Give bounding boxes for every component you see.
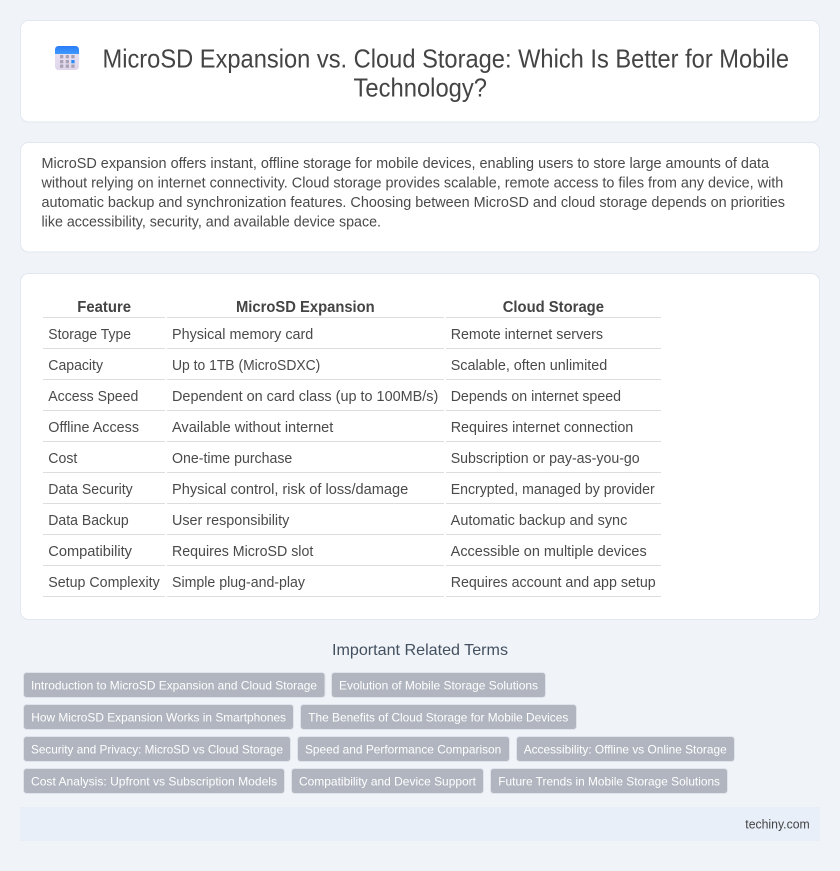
tag: speed and performance: Speed and Performance Comparison — [305, 742, 501, 756]
tag: compatibility: Compatibility and Device Support — [299, 774, 477, 788]
title: Technology? — [354, 74, 487, 102]
row: setup complexity: Simple plug-and-play — [172, 575, 306, 591]
footer: techiny.com — [745, 816, 810, 831]
row: setup complexity: Requires account and app setup — [451, 575, 656, 591]
row: capacity — [48, 358, 607, 374]
tag: cost analysis — [24, 768, 284, 794]
row: capacity: Capacity — [48, 358, 104, 374]
tag: accessibility: Accessibility: Offline vs Online Storage — [524, 742, 727, 756]
title: MicroSD Expansion vs. Cloud Storage: Which Is Better for Mobile — [102, 46, 789, 74]
tag: introduction — [24, 672, 325, 698]
row: storage type: Remote internet servers — [451, 327, 603, 343]
row: storage type: Physical memory card — [172, 327, 313, 343]
row: access speed — [48, 389, 621, 405]
panel: description: without relying on internet connectivity. Cloud storage provides scalable, remote access to files from any device, with — [40, 175, 783, 191]
panel: description: like accessibility, security, and available device space. — [42, 214, 381, 230]
row: setup complexity: Setup Complexity — [48, 575, 160, 591]
tag: compatibility — [292, 768, 484, 794]
table header row: Feature — [77, 299, 131, 316]
section heading: important related terms: Important Related Terms — [332, 642, 508, 659]
row: data security: Encrypted, managed by provider — [451, 482, 655, 498]
row: offline access: Available without internet — [172, 420, 333, 436]
panel: description: MicroSD expansion offers instant, offline storage for mobile devices, enabling users to store large amounts of data — [42, 156, 769, 172]
row: data security: Physical control, risk of loss/damage — [172, 482, 408, 498]
panel: comparison table — [20, 274, 820, 620]
row: storage type — [48, 327, 603, 343]
row: access speed: Depends on internet speed — [451, 389, 621, 405]
row: capacity: Up to 1TB (MicroSDXC) — [172, 358, 320, 374]
row: cost: Subscription or pay-as-you-go — [451, 451, 640, 467]
tag: how microsd works — [24, 704, 294, 730]
row: compatibility: Requires MicroSD slot — [172, 544, 313, 560]
row: compatibility: Accessible on multiple devices — [451, 544, 647, 560]
tag: future trends: Future Trends in Mobile Storage Solutions — [498, 774, 720, 788]
tag: benefits of cloud: The Benefits of Cloud Storage for Mobile Devices — [308, 710, 568, 724]
tag: security and privacy: Security and Privacy: MicroSD vs Cloud Storage — [31, 742, 283, 756]
table header row — [77, 299, 604, 316]
tag: evolution: Evolution of Mobile Storage Solutions — [339, 678, 538, 692]
row: data backup: Automatic backup and sync — [451, 513, 627, 529]
tag: security and privacy — [24, 736, 290, 762]
tag: evolution — [332, 672, 546, 698]
row: data backup: Data Backup — [48, 513, 129, 529]
row: offline access: Requires internet connection — [451, 420, 633, 436]
row: storage type: Storage Type — [48, 327, 131, 343]
panel: description — [20, 142, 820, 252]
row: offline access: Offline Access — [48, 420, 139, 436]
icon: calendar grid — [55, 46, 79, 70]
table header row: Cloud Storage — [503, 299, 604, 316]
row: compatibility — [48, 544, 647, 560]
row: compatibility: Compatibility — [48, 544, 133, 560]
table header row: MicroSD Expansion — [236, 299, 375, 316]
row: setup complexity — [48, 575, 656, 591]
row: data security: Data Security — [48, 482, 133, 498]
tag: how microsd works: How MicroSD Expansion Works in Smartphones — [31, 710, 286, 724]
row: access speed: Access Speed — [48, 389, 138, 405]
footer — [20, 807, 820, 841]
row: offline access — [48, 420, 633, 436]
title — [102, 46, 789, 102]
tag: cost analysis: Cost Analysis: Upfront vs Subscription Models — [31, 774, 277, 788]
row: cost — [48, 451, 640, 467]
tag: speed and performance — [298, 736, 510, 762]
tag: introduction: Introduction to MicroSD Expansion and Cloud Storage — [31, 678, 317, 692]
row: data security — [48, 482, 655, 498]
tag: future trends — [490, 768, 728, 794]
tag list — [24, 672, 734, 794]
tag: benefits of cloud — [300, 704, 576, 730]
tag: accessibility — [516, 736, 734, 762]
row: access speed: Dependent on card class (up to 100MB/s) — [172, 389, 438, 405]
row: data backup — [48, 513, 627, 529]
row: cost: Cost — [48, 451, 77, 467]
row: data backup: User responsibility — [172, 513, 290, 529]
panel: title header — [20, 20, 820, 122]
panel: description: automatic backup and synchronization features. Choosing between MicroSD and cloud storage depends on priorities — [42, 195, 785, 211]
row: capacity: Scalable, often unlimited — [451, 358, 607, 374]
row: cost: One-time purchase — [172, 451, 292, 467]
